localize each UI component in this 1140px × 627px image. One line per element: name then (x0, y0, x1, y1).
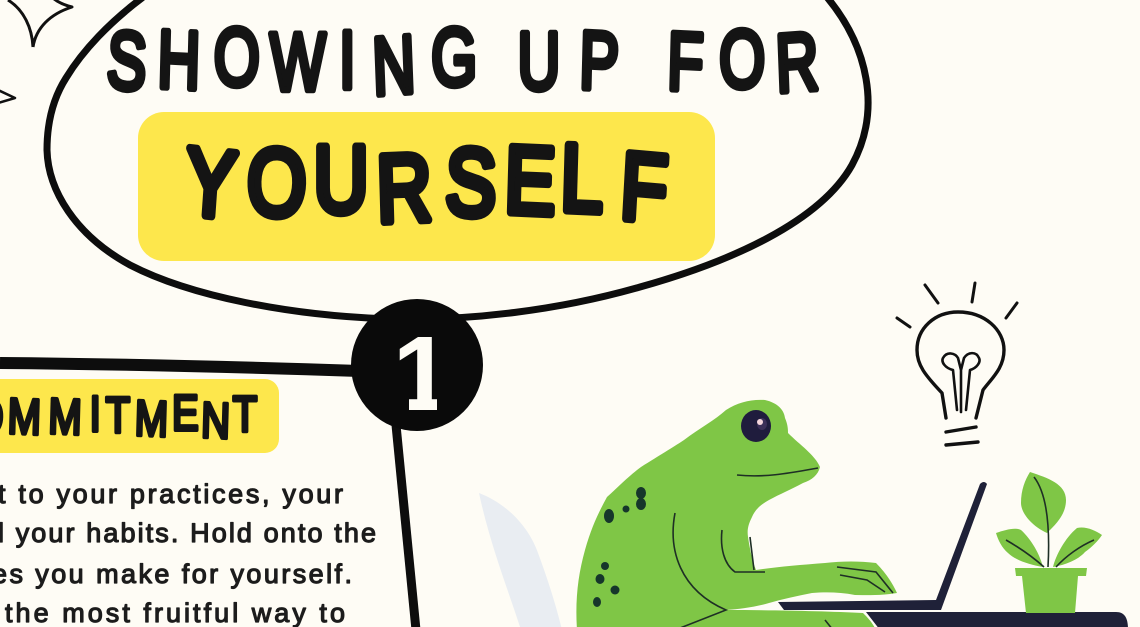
icon: small sparkle left edge (0, 90, 15, 103)
vertical connector line (396, 425, 416, 627)
frog eye (741, 410, 771, 442)
body text: es you make for yourself. (0, 559, 352, 589)
title line one (105, 12, 820, 113)
icon: chair back (479, 493, 562, 627)
horizontal connector line (0, 363, 360, 371)
frog mouth and body lines (673, 468, 893, 627)
body text (0, 479, 376, 627)
icon: sparkle top left (8, 0, 72, 47)
number badge 1 (351, 299, 483, 433)
icon: potted plant (996, 472, 1102, 613)
title line one: FOR (666, 14, 820, 110)
laptop (778, 482, 987, 610)
frog body (576, 400, 897, 627)
title line one: UP (518, 15, 620, 108)
title line one: SHOWING (105, 12, 477, 113)
body text: l your habits. Hold onto the (0, 518, 376, 548)
icon: light bulb (897, 283, 1017, 445)
title highlight: yourself: YOURSELF (182, 125, 670, 243)
frog illustration (576, 400, 897, 627)
body text: t to your practices, your (0, 479, 343, 509)
number badge 1: 1 (393, 315, 451, 433)
title bubble outline (47, 0, 868, 319)
desk (866, 612, 1128, 627)
frog spots (593, 487, 646, 607)
title highlight: yourself (138, 112, 715, 261)
